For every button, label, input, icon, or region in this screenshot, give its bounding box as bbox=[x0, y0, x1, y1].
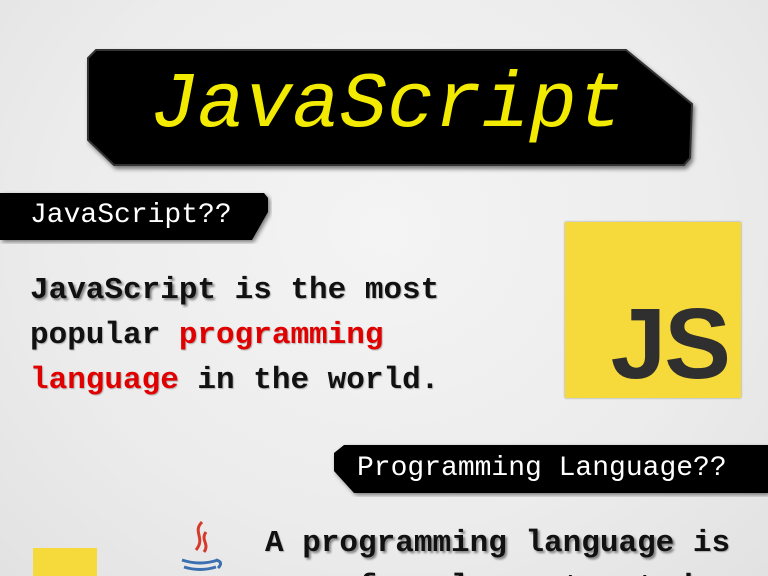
title banner bbox=[86, 49, 698, 172]
section label: Programming Language??: Programming Language?? bbox=[357, 453, 727, 484]
title text: JavaScript bbox=[150, 60, 624, 150]
icon: java cup bbox=[182, 521, 222, 571]
section label: Programming Language?? bbox=[333, 444, 768, 497]
icon: yellow square bbox=[33, 548, 97, 576]
section label: JavaScript?? bbox=[0, 192, 272, 244]
intro text: JavaScript is the most popular programming language in the world. bbox=[30, 273, 439, 398]
icon: JS logo: JS bbox=[611, 288, 729, 400]
icon: JS logo bbox=[565, 222, 741, 398]
section label: JavaScript??: JavaScript?? bbox=[30, 200, 232, 231]
